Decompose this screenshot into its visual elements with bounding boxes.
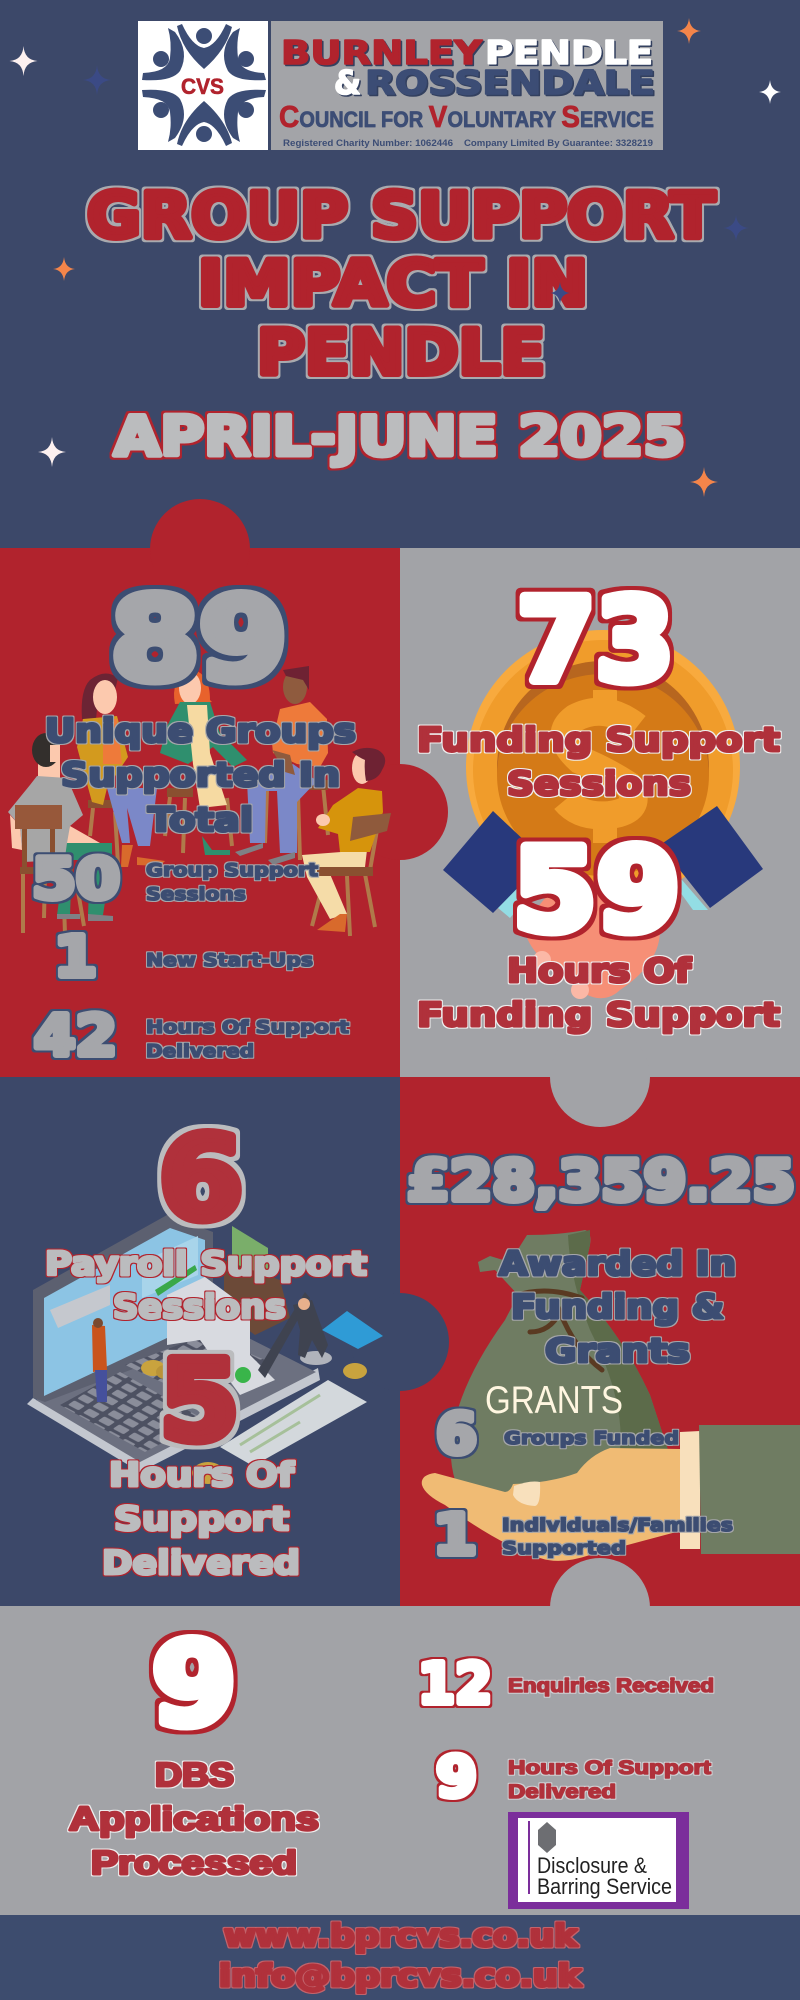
heading: DBS applications processed: Applications bbox=[69, 1800, 319, 1837]
date heading: APRIL-JUNE 2025 bbox=[114, 405, 685, 468]
stat: 12 enquiries: 12 bbox=[418, 1652, 492, 1717]
logo: organisation name block: PENDLE bbox=[485, 33, 653, 72]
heading: unique groups: Unique Groups bbox=[45, 711, 356, 750]
stat: 50 sessions: Sessions bbox=[146, 884, 246, 905]
stat: 9 hours: Delivered bbox=[508, 1782, 616, 1803]
stat: 9 hours: Hours Of Support bbox=[508, 1758, 712, 1779]
big amount: funding awarded: £28,359.25 bbox=[407, 1149, 795, 1214]
big number: 59: 59 bbox=[513, 824, 680, 957]
heading: unique groups bbox=[45, 711, 356, 839]
big number: 6 payroll: 6 bbox=[159, 1112, 243, 1245]
stat: 42 hours: Delivered bbox=[146, 1041, 254, 1062]
heading: unique groups: Supported In bbox=[61, 755, 340, 794]
heading: DBS applications processed bbox=[69, 1756, 319, 1881]
stat: 9 hours bbox=[436, 1745, 712, 1810]
heading: DBS applications processed: Processed bbox=[91, 1844, 297, 1881]
heading: hours of support delivered: Support bbox=[114, 1499, 289, 1538]
logo: CVS emblem: CVS bbox=[181, 74, 224, 99]
title bbox=[87, 179, 715, 389]
logo: organisation name block: ROSSENDALE bbox=[365, 63, 655, 102]
logo: organisation name block bbox=[271, 21, 663, 150]
illustration: people in a support circle bbox=[8, 666, 391, 936]
panel: funding support (grey) bbox=[352, 548, 800, 1077]
illustration: grants bag and hand bbox=[422, 1230, 800, 1561]
big number: 9 DBS: 9 bbox=[152, 1618, 236, 1751]
decorative stars bbox=[10, 18, 781, 497]
illustration: payroll laptop bbox=[27, 1215, 383, 1484]
heading: hours of funding support bbox=[417, 951, 780, 1034]
heading: payroll support sessions: Payroll Support bbox=[45, 1244, 367, 1283]
stat: 1 start-up: 1 bbox=[54, 925, 97, 990]
footer: contact details bbox=[219, 1919, 582, 1994]
stat: 1 start-up bbox=[54, 925, 313, 990]
heading: funding support sessions bbox=[417, 720, 780, 803]
footer: contact details: www.bprcvs.co.uk bbox=[224, 1919, 578, 1954]
heading: payroll support sessions: Sessions bbox=[113, 1287, 286, 1326]
panel: DBS (grey) bbox=[0, 1606, 800, 1915]
stat: 1 start-up: New Start-Ups bbox=[146, 950, 313, 971]
heading: awarded in funding and grants: Funding & bbox=[511, 1287, 724, 1326]
heading: hours of funding support: Funding Support bbox=[417, 995, 780, 1034]
heading: awarded in funding and grants: Awarded In bbox=[499, 1244, 736, 1283]
illustration: grants bag and hand: GRANTS bbox=[485, 1379, 623, 1422]
stat: 12 enquiries: Enquiries Received bbox=[508, 1676, 714, 1697]
stat: 50 sessions: 50 bbox=[32, 847, 120, 912]
stat: 9 hours: 9 bbox=[436, 1745, 477, 1810]
stat: 1 individual supported: Supported bbox=[502, 1538, 626, 1559]
heading: awarded in funding and grants bbox=[499, 1244, 736, 1370]
heading: funding support sessions: Sessions bbox=[507, 764, 691, 803]
stat: 1 individual supported bbox=[433, 1503, 733, 1568]
stat: 6 groups funded: Groups Funded bbox=[504, 1428, 679, 1449]
heading: hours of support delivered: Delivered bbox=[102, 1543, 300, 1582]
logo: organisation name block: & bbox=[334, 63, 361, 102]
stat: 1 individual supported: Individuals/Families bbox=[502, 1515, 733, 1536]
heading: hours of support delivered: Hours Of bbox=[109, 1455, 295, 1494]
title: IMPACT IN bbox=[198, 247, 588, 320]
heading: DBS applications processed: DBS bbox=[155, 1756, 234, 1793]
panel: group support (red) bbox=[0, 499, 400, 1077]
stat: 6 groups funded bbox=[436, 1402, 679, 1467]
star over title bbox=[550, 282, 570, 304]
heading: hours of support delivered bbox=[102, 1455, 300, 1582]
heading: unique groups: Total bbox=[148, 800, 253, 839]
logo: Disclosure and Barring Service: Barring Service bbox=[537, 1874, 672, 1899]
panel: payroll (navy) bbox=[0, 1077, 400, 1606]
heading: hours of funding support: Hours Of bbox=[507, 951, 692, 990]
logo: Disclosure and Barring Service: Disclosure & bbox=[537, 1853, 647, 1878]
logo: organisation name block: Company Limited By Guarantee: 3328219 bbox=[464, 138, 653, 148]
stat: 6 groups funded: 6 bbox=[436, 1402, 477, 1467]
logo: CVS emblem bbox=[138, 21, 268, 150]
title: GROUP SUPPORT bbox=[87, 179, 715, 252]
illustration: coin and handshake bbox=[443, 630, 763, 999]
stat: 12 enquiries bbox=[418, 1652, 714, 1717]
logo: organisation name block: COUNCIL FOR VOLUNTARY SERVICE bbox=[279, 99, 654, 134]
big number: 89: 89 bbox=[111, 573, 287, 706]
logo: organisation name block: BURNLEY bbox=[281, 33, 483, 72]
logo: organisation name block: Registered Charity Number: 1062446 bbox=[283, 138, 453, 148]
footer: contact details: info@bprcvs.co.uk bbox=[219, 1959, 582, 1994]
big number: 73: 73 bbox=[517, 574, 674, 707]
stat: 42 hours: 42 bbox=[34, 1004, 117, 1069]
big number: 5 payroll: 5 bbox=[160, 1337, 239, 1465]
heading: funding support sessions: Funding Support bbox=[417, 720, 780, 759]
title: PENDLE bbox=[257, 316, 545, 389]
stat: 1 individual supported: 1 bbox=[433, 1503, 477, 1568]
logo: Disclosure and Barring Service bbox=[508, 1812, 689, 1909]
heading: awarded in funding and grants: Grants bbox=[545, 1331, 690, 1370]
panel: grants (red) bbox=[351, 1027, 800, 1658]
stat: 50 sessions bbox=[32, 847, 318, 912]
panel: footer band bbox=[0, 1915, 800, 2000]
heading: payroll support sessions bbox=[45, 1244, 367, 1326]
stat: 42 hours bbox=[34, 1004, 349, 1069]
stat: 50 sessions: Group Support bbox=[146, 860, 318, 881]
stat: 42 hours: Hours Of Support bbox=[146, 1017, 349, 1038]
